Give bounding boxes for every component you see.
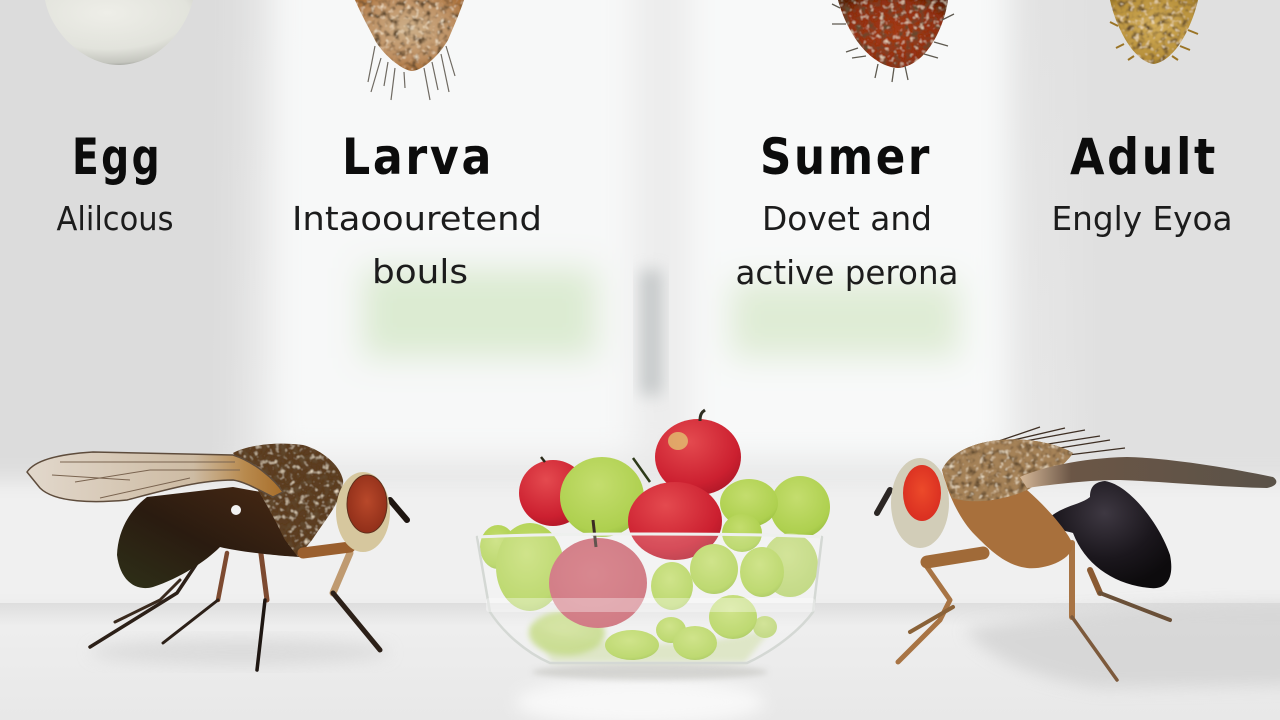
stage: sumer: Dovet and xyxy=(762,199,932,238)
fly bristles: right xyxy=(993,427,1125,456)
bowl shadow xyxy=(532,664,768,680)
fly wing: left xyxy=(27,452,283,502)
fly head: left xyxy=(336,472,390,552)
stage: egg xyxy=(56,128,174,238)
stage: adult xyxy=(1052,128,1232,238)
stage: egg: Alilcous xyxy=(56,199,174,238)
fly: right xyxy=(877,427,1276,680)
bowl contents xyxy=(496,520,818,662)
fly abdomen: right xyxy=(1050,481,1171,588)
stage: adult: Adult xyxy=(1070,128,1218,186)
fly thorax: left xyxy=(233,444,343,557)
stage: larva: Larva xyxy=(342,128,494,186)
fly: left xyxy=(27,444,407,670)
fly thorax: right xyxy=(942,439,1073,568)
icon: egg xyxy=(45,0,193,65)
fly wing: right xyxy=(1020,457,1276,488)
fly abdomen: left xyxy=(117,487,305,588)
fly eye: left xyxy=(347,475,387,533)
fly legs: left xyxy=(90,500,407,670)
table surface xyxy=(0,485,1280,720)
fly eye: right xyxy=(903,465,941,521)
stage: sumer xyxy=(736,128,958,292)
fly legs: right xyxy=(877,490,1170,680)
fly head: right xyxy=(891,458,949,548)
stage: egg: Egg xyxy=(72,128,162,186)
fly femur: right xyxy=(927,553,983,562)
stage: larva xyxy=(292,128,542,291)
fruit bowl xyxy=(477,410,830,680)
back fruit xyxy=(480,410,830,569)
stage: larva: bouls xyxy=(372,252,468,291)
icon: larva xyxy=(355,0,464,100)
glass bowl xyxy=(477,534,822,663)
fly femur: left xyxy=(303,547,350,553)
icon: pupa xyxy=(832,0,954,82)
icon: adult stage xyxy=(1110,0,1198,64)
stage: larva: Intaoouretend xyxy=(292,199,542,238)
stage: adult: Engly Eyoa xyxy=(1052,199,1232,238)
stage: sumer: active perona xyxy=(736,253,958,292)
stage: sumer: Sumer xyxy=(760,128,932,186)
fly spot xyxy=(231,505,241,515)
